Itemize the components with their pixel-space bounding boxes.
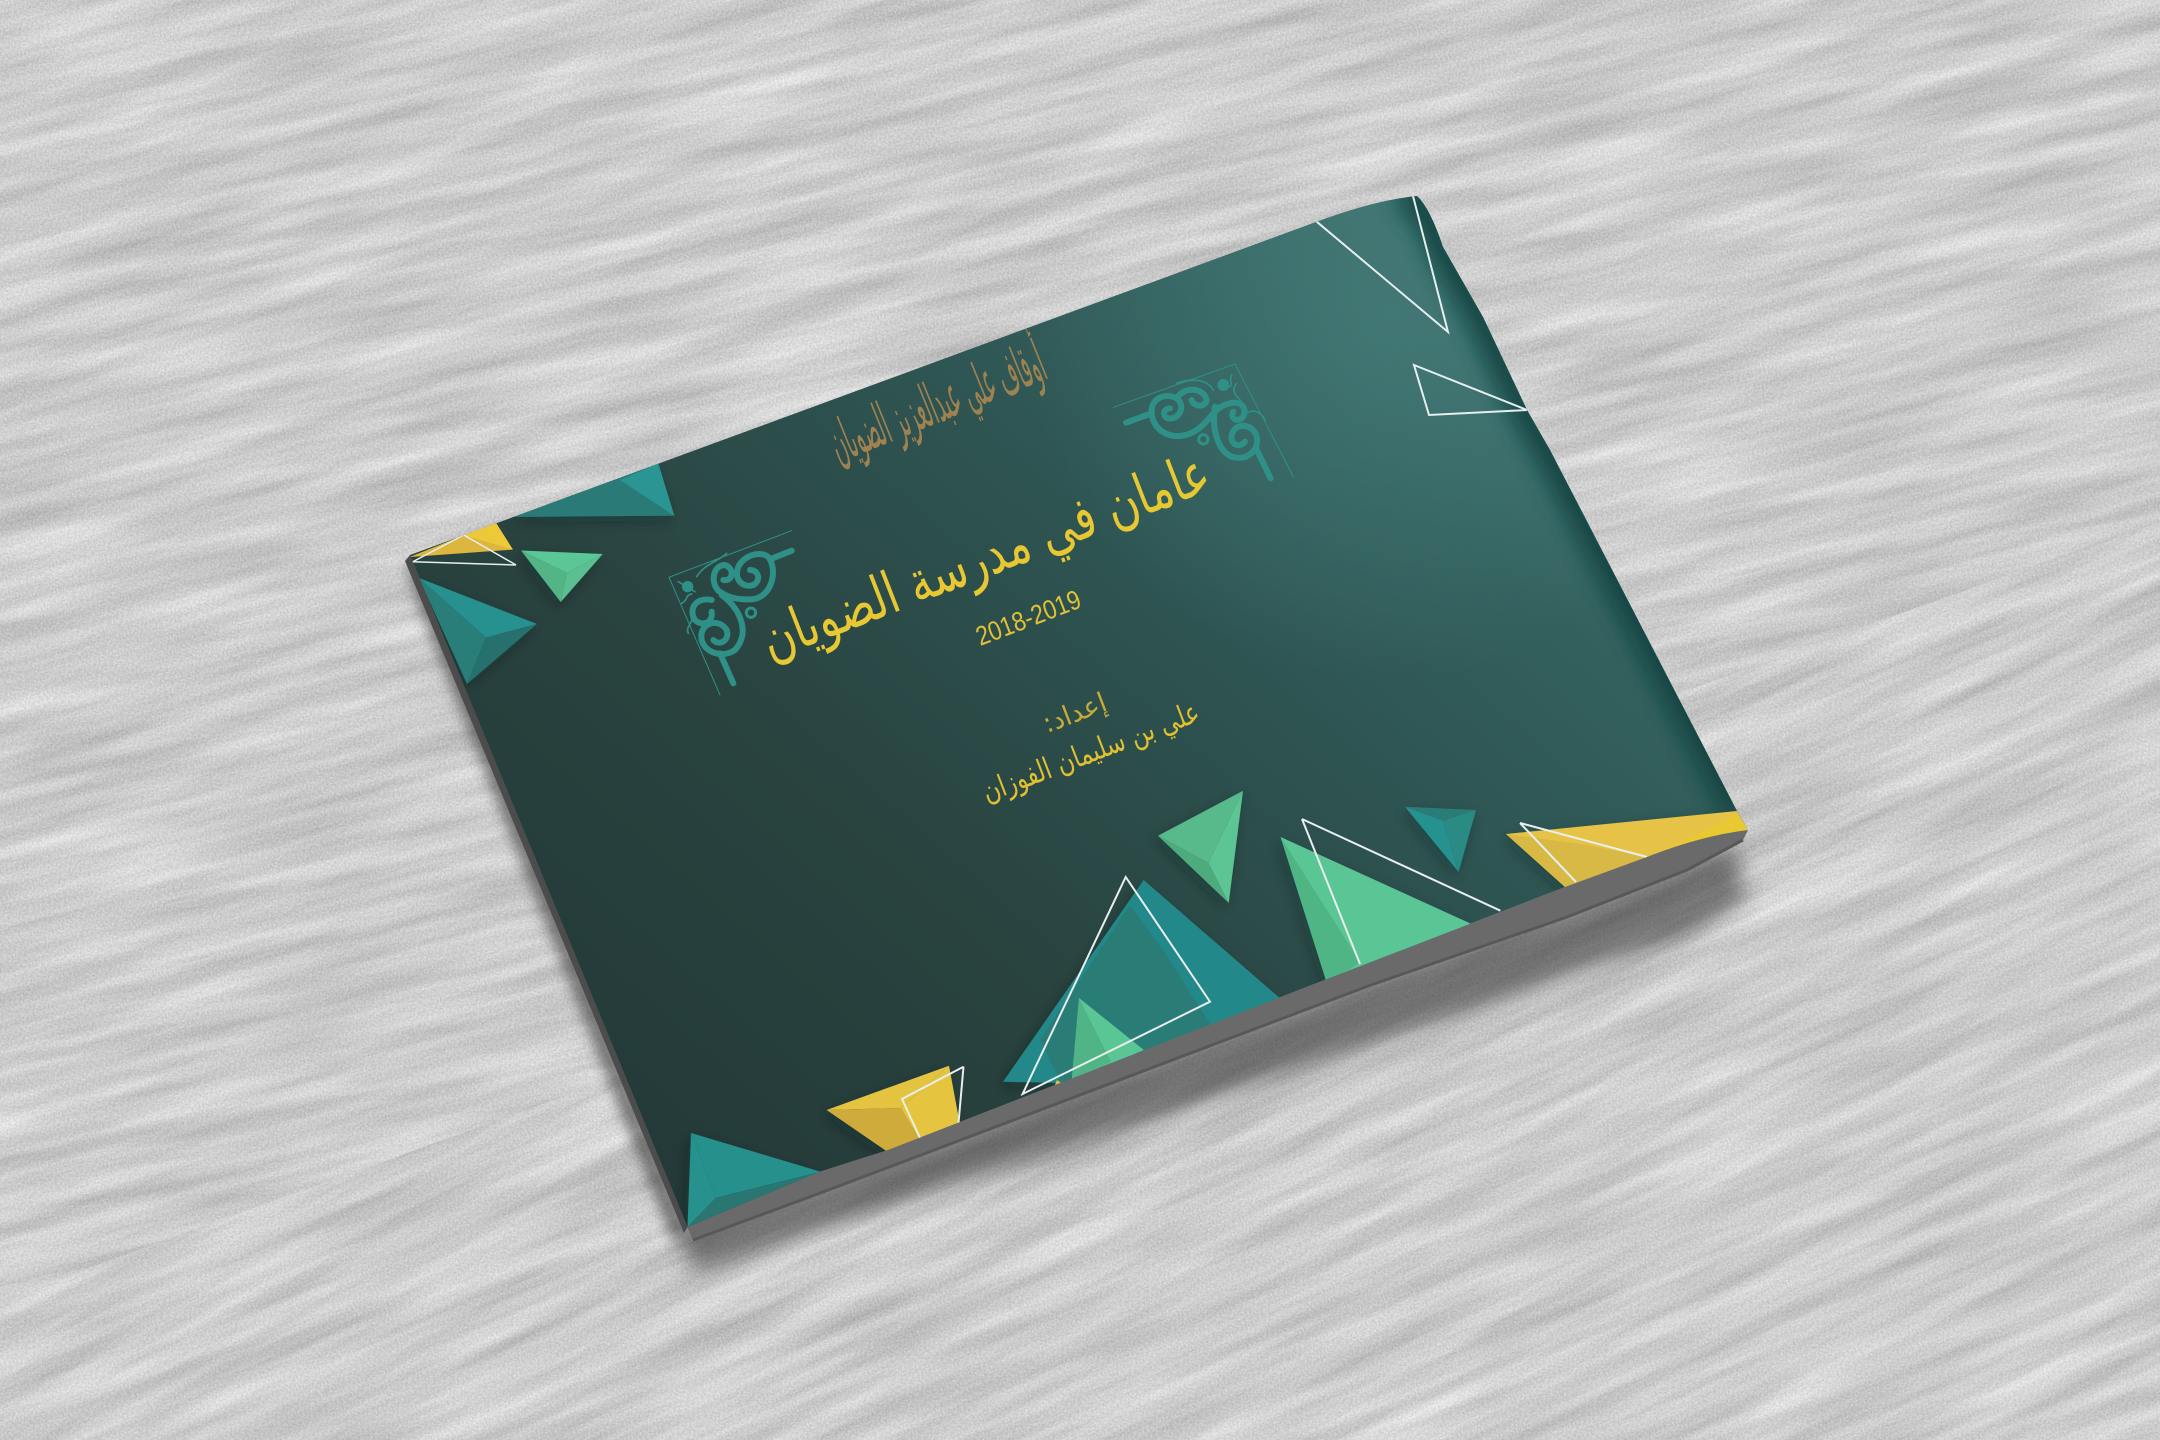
- book spine: page block edge: [405, 555, 1748, 1240]
- triangle: small teal right: [1405, 807, 1476, 872]
- triangle: teal top left: [512, 464, 674, 517]
- triangle: large green: [1281, 837, 1474, 985]
- triangles: white outline top right: [1317, 196, 1527, 415]
- triangles: white outlines bottom: [902, 819, 1647, 1138]
- triangle: yellow corner: [410, 522, 516, 565]
- triangle: large teal: [1003, 880, 1282, 1083]
- ornament: top right corner scroll: [1113, 364, 1293, 478]
- triangle: yellow bottom right: [1506, 811, 1748, 887]
- triangle: small green in teal: [1054, 998, 1144, 1088]
- triangle: green centre: [1158, 791, 1243, 903]
- book cover: [380, 180, 1780, 1240]
- year range: 2018-2019: [972, 584, 1085, 652]
- cover background gradient: [380, 180, 1780, 1240]
- triangle: green top left: [521, 550, 603, 602]
- triangle: teal bottom left: [688, 1133, 821, 1227]
- prepared by label: إعداد:: [1039, 687, 1111, 740]
- triangle: big teal left: [419, 578, 537, 684]
- book shadow: [405, 560, 1745, 1272]
- book cover: أوقاف علي عبدالعزيز الضويان: [817, 324, 1055, 477]
- author name: علي بن سليمان الفوزان: [977, 695, 1205, 810]
- title: عامان في مدرسة الضويان: [751, 438, 1220, 675]
- ornament: bottom left corner scroll: [669, 531, 792, 695]
- triangle: yellow bottom left: [827, 1066, 960, 1152]
